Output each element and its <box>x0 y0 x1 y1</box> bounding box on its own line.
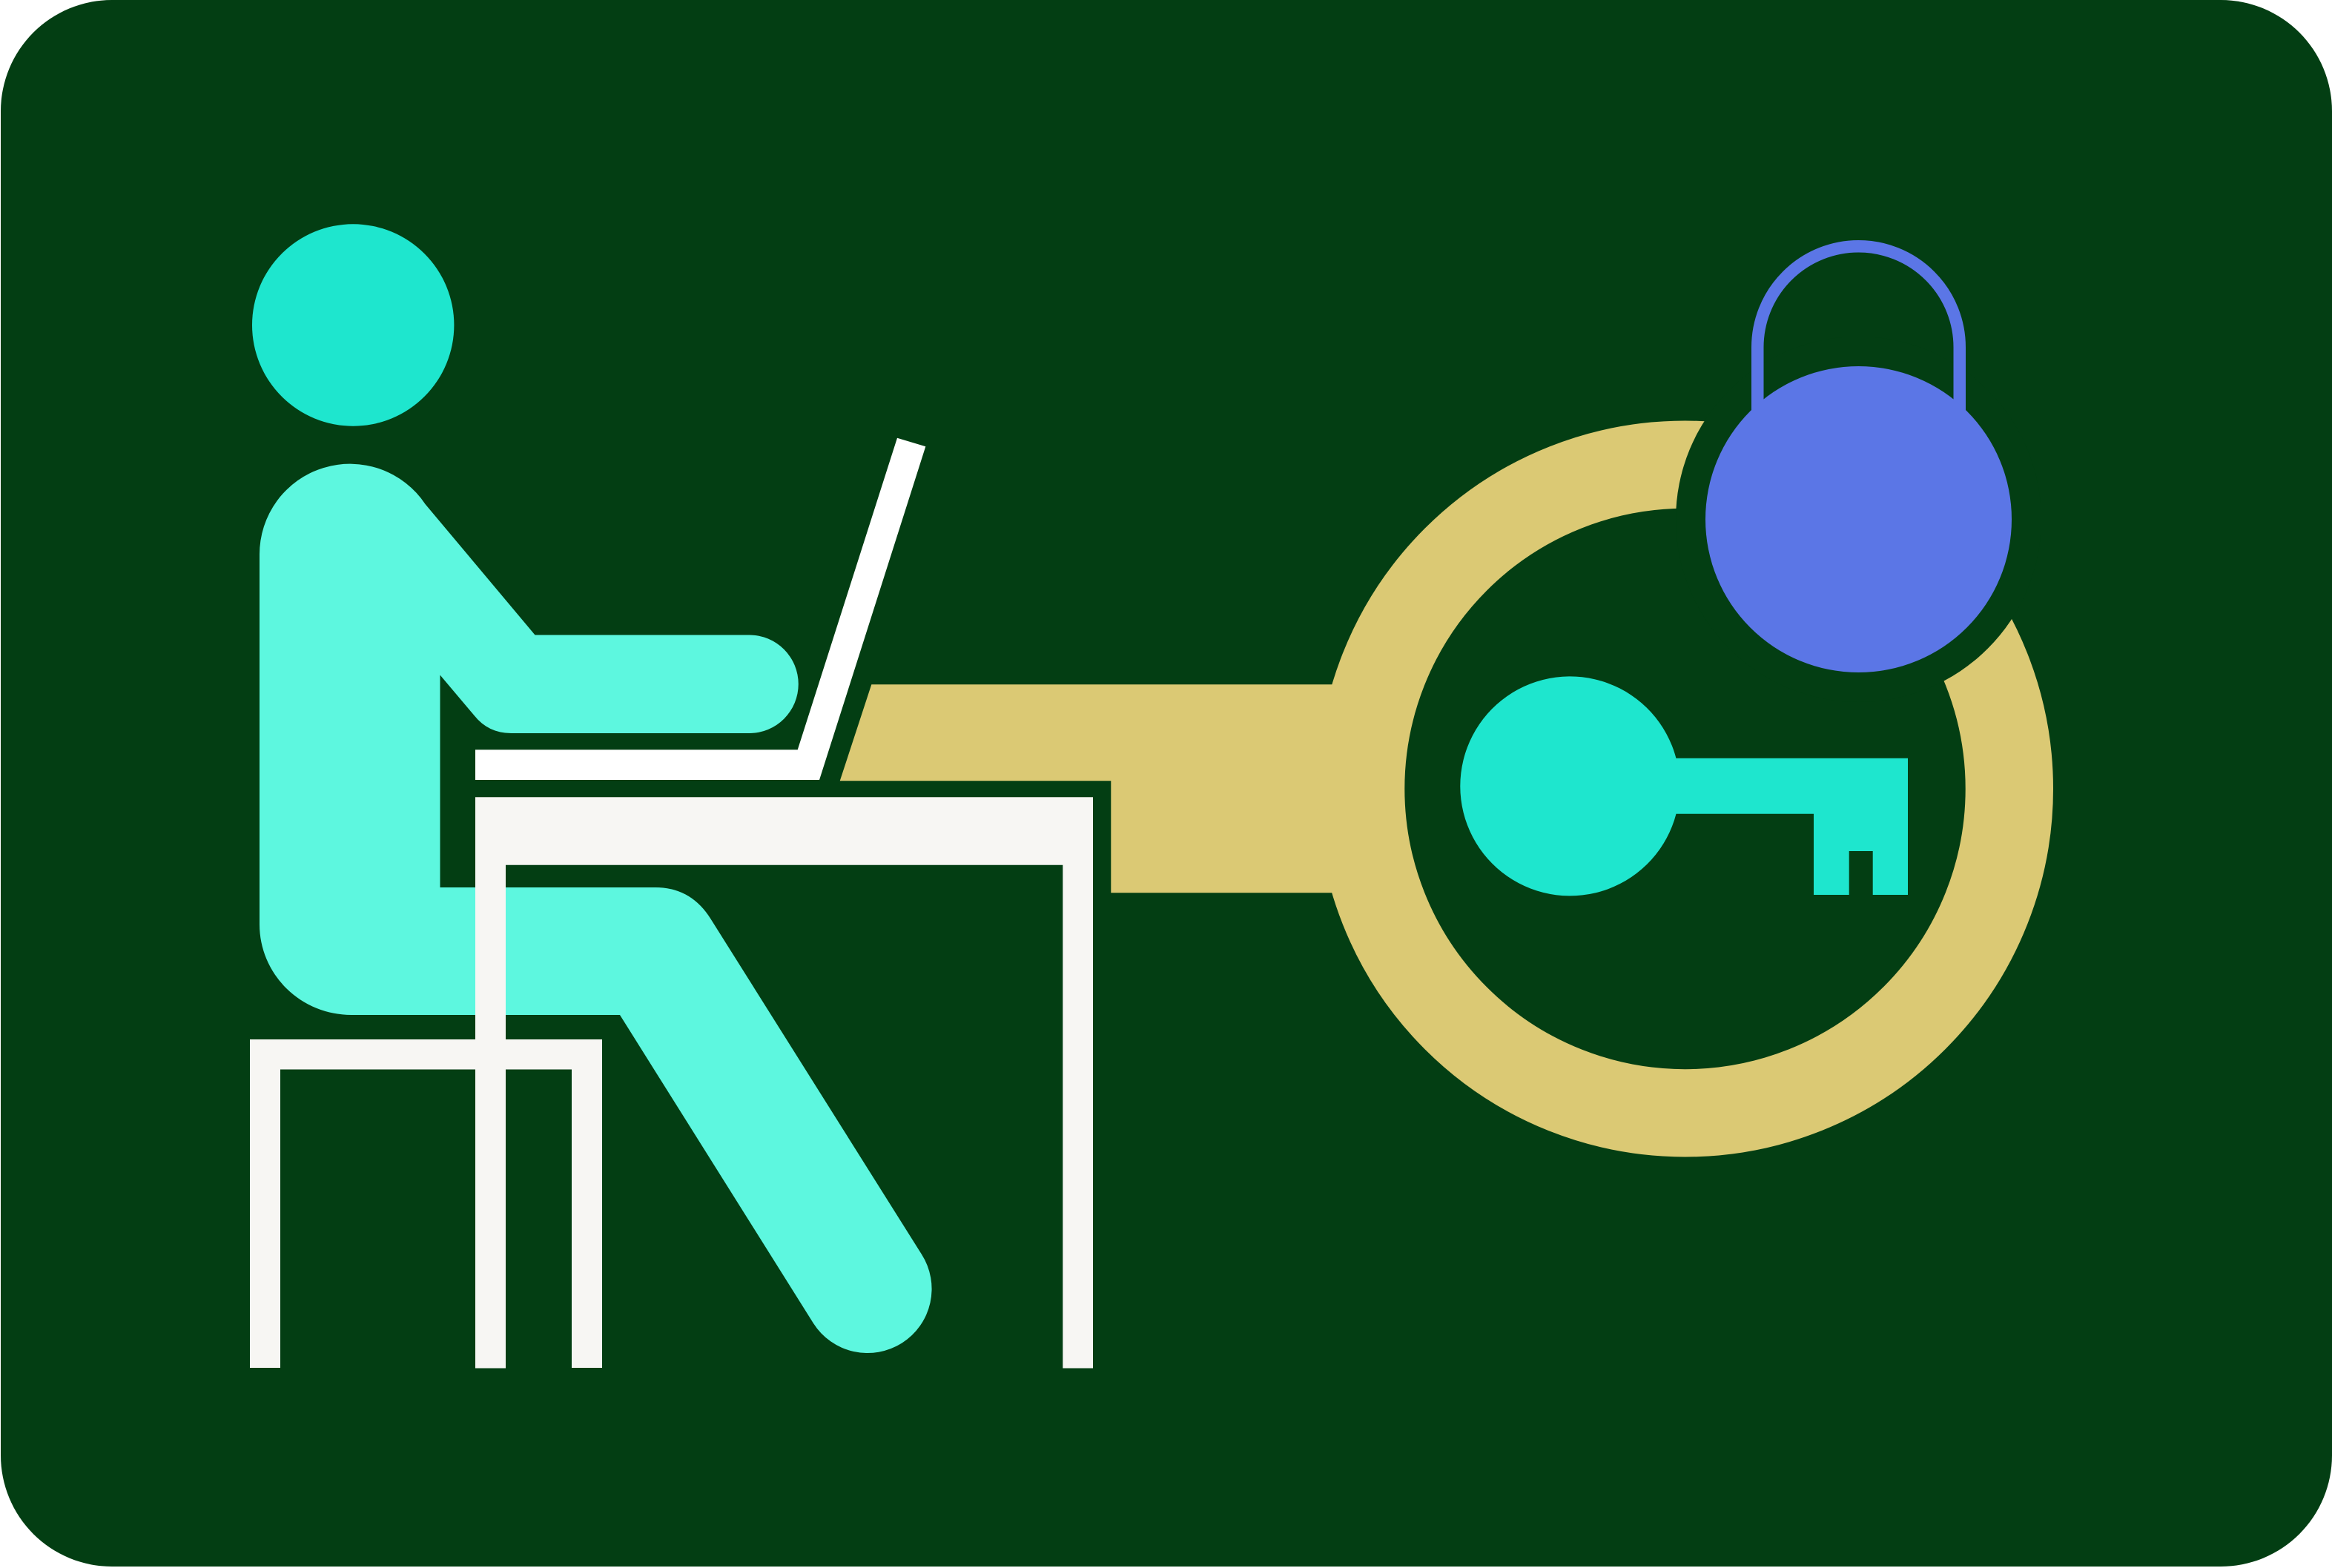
padlock shackle <box>1757 246 1960 430</box>
icon: golden key ring and stem <box>840 465 2009 1113</box>
desk <box>475 797 1093 1369</box>
key stem <box>840 684 1372 893</box>
icon: teal key <box>1460 676 1908 896</box>
icon: padlock <box>1676 246 2041 702</box>
figure: seated person <box>252 224 932 1353</box>
padlock body <box>1705 366 2012 672</box>
padlock halo cut-out <box>1676 337 2041 702</box>
laptop <box>475 438 925 780</box>
key ring <box>1361 465 2009 1113</box>
chair <box>250 1039 602 1368</box>
person head <box>252 224 454 426</box>
person body <box>260 464 932 1353</box>
